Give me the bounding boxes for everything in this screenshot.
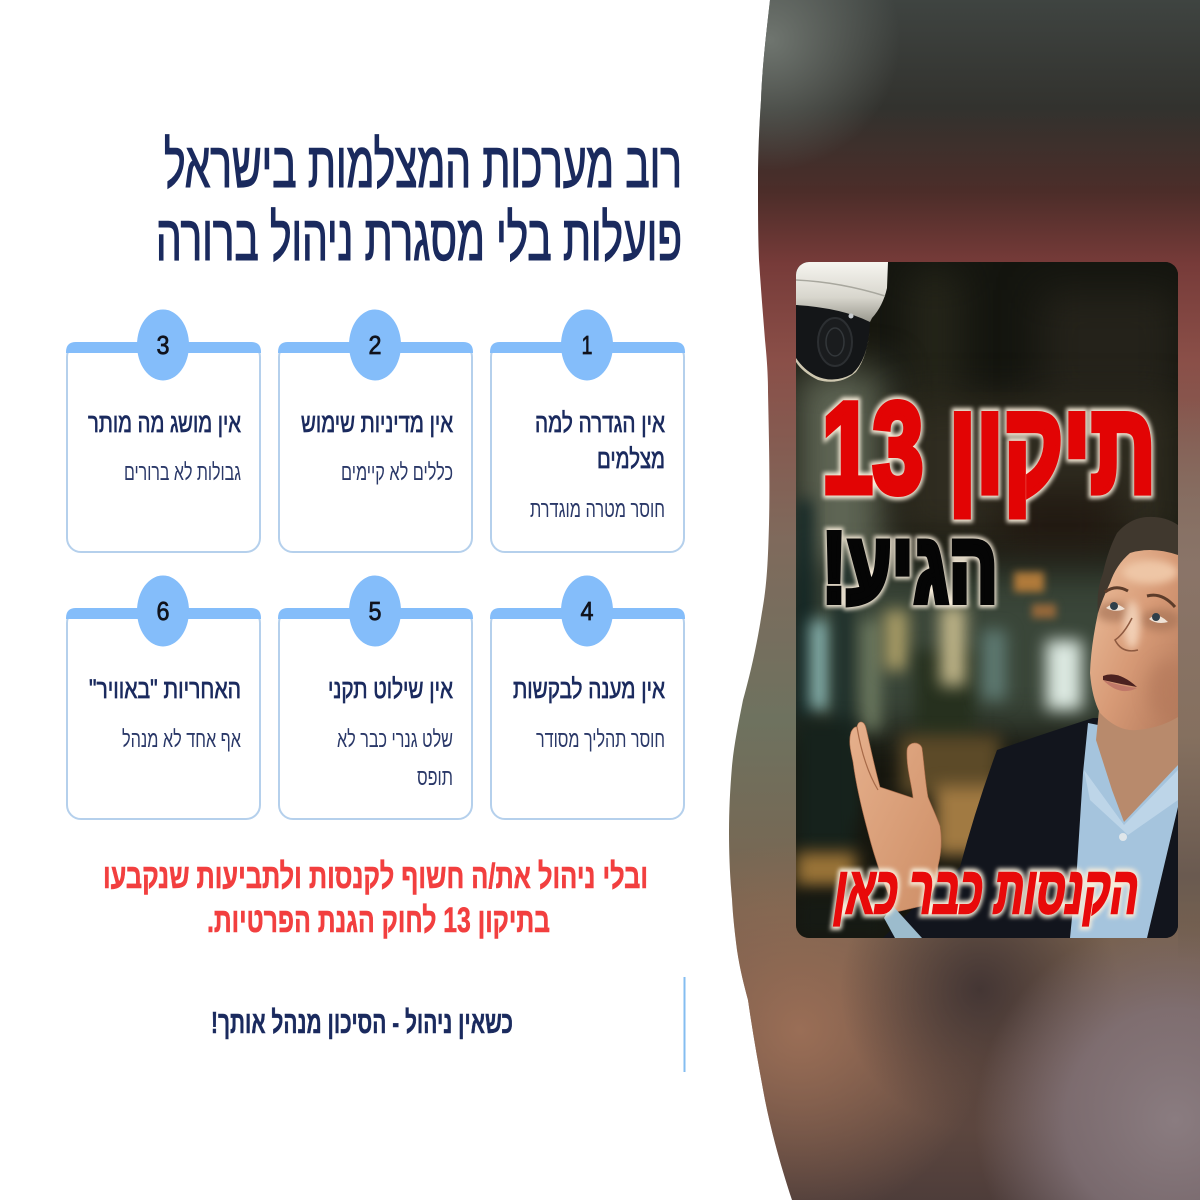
card 3: גבולות לא ברורים bbox=[124, 459, 241, 485]
poster headline: has arrived: הגיע! bbox=[822, 512, 998, 624]
red warning text: בתיקון 13 לחוק הגנת הפרטיות. bbox=[207, 901, 550, 940]
card 2 bbox=[278, 310, 473, 552]
card 4 bbox=[490, 576, 685, 819]
office background blur bbox=[796, 262, 1178, 938]
man hair bbox=[1098, 517, 1178, 613]
card 5: אין שילוט תקני bbox=[328, 674, 453, 704]
man shirt bbox=[1070, 723, 1178, 938]
card 4: 4 bbox=[580, 596, 594, 626]
closing statement: כשאין ניהול - הסיכון מנהל אותך! bbox=[211, 1005, 513, 1040]
card 2: כללים לא קיימים bbox=[341, 459, 453, 485]
man jacket bbox=[883, 718, 1178, 938]
card 4: חוסר תהליך מסודר bbox=[536, 726, 665, 752]
blurred background shape bbox=[720, 0, 1200, 1200]
card 2: אין מדיניות שימוש bbox=[301, 408, 453, 438]
card 6 bbox=[66, 576, 261, 819]
man neck bbox=[1096, 700, 1178, 822]
poster headline: has arrived bbox=[821, 524, 1000, 614]
red warning text: ובלי ניהול את/ה חשוף לקנסות ולתביעות שנקבעו bbox=[103, 857, 648, 896]
card 1: מצלמים bbox=[597, 444, 665, 474]
icon: security camera bbox=[796, 262, 888, 382]
red warning text bbox=[103, 857, 648, 940]
card 3: 3 bbox=[156, 330, 170, 360]
title bbox=[156, 129, 682, 274]
card 5: 5 bbox=[368, 596, 382, 626]
hand bbox=[850, 722, 941, 912]
title: רוב מערכות המצלמות בישראל bbox=[164, 129, 682, 201]
poster headline: has arrived: הגיע! bbox=[822, 512, 998, 624]
card 3: אין מושג מה מותר bbox=[88, 408, 241, 438]
card 6: אף אחד לא מנהל bbox=[122, 726, 241, 752]
man eyes and mouth bbox=[1103, 588, 1175, 691]
poster photo bbox=[796, 262, 1192, 938]
card 4: אין מענה לבקשות bbox=[513, 674, 665, 704]
shirt cuff bbox=[884, 905, 922, 938]
card 6: האחריות "באוויר" bbox=[89, 674, 241, 704]
card 6: 6 bbox=[156, 596, 170, 626]
card 3 bbox=[66, 310, 261, 552]
card 1 bbox=[490, 310, 685, 552]
card 5 bbox=[278, 576, 473, 819]
card 1: אין הגדרה למה bbox=[535, 408, 665, 438]
accent line bbox=[684, 977, 686, 1072]
man face bbox=[1090, 550, 1178, 730]
card 1: 1 bbox=[582, 330, 592, 360]
title: פועלות בלי מסגרת ניהול ברורה bbox=[156, 202, 682, 274]
card 2: 2 bbox=[368, 330, 382, 360]
card 5: תופס bbox=[417, 764, 453, 790]
card 5: שלט גנרי כבר לא bbox=[337, 726, 453, 752]
card 1: חוסר מטרה מוגדרת bbox=[530, 496, 665, 522]
